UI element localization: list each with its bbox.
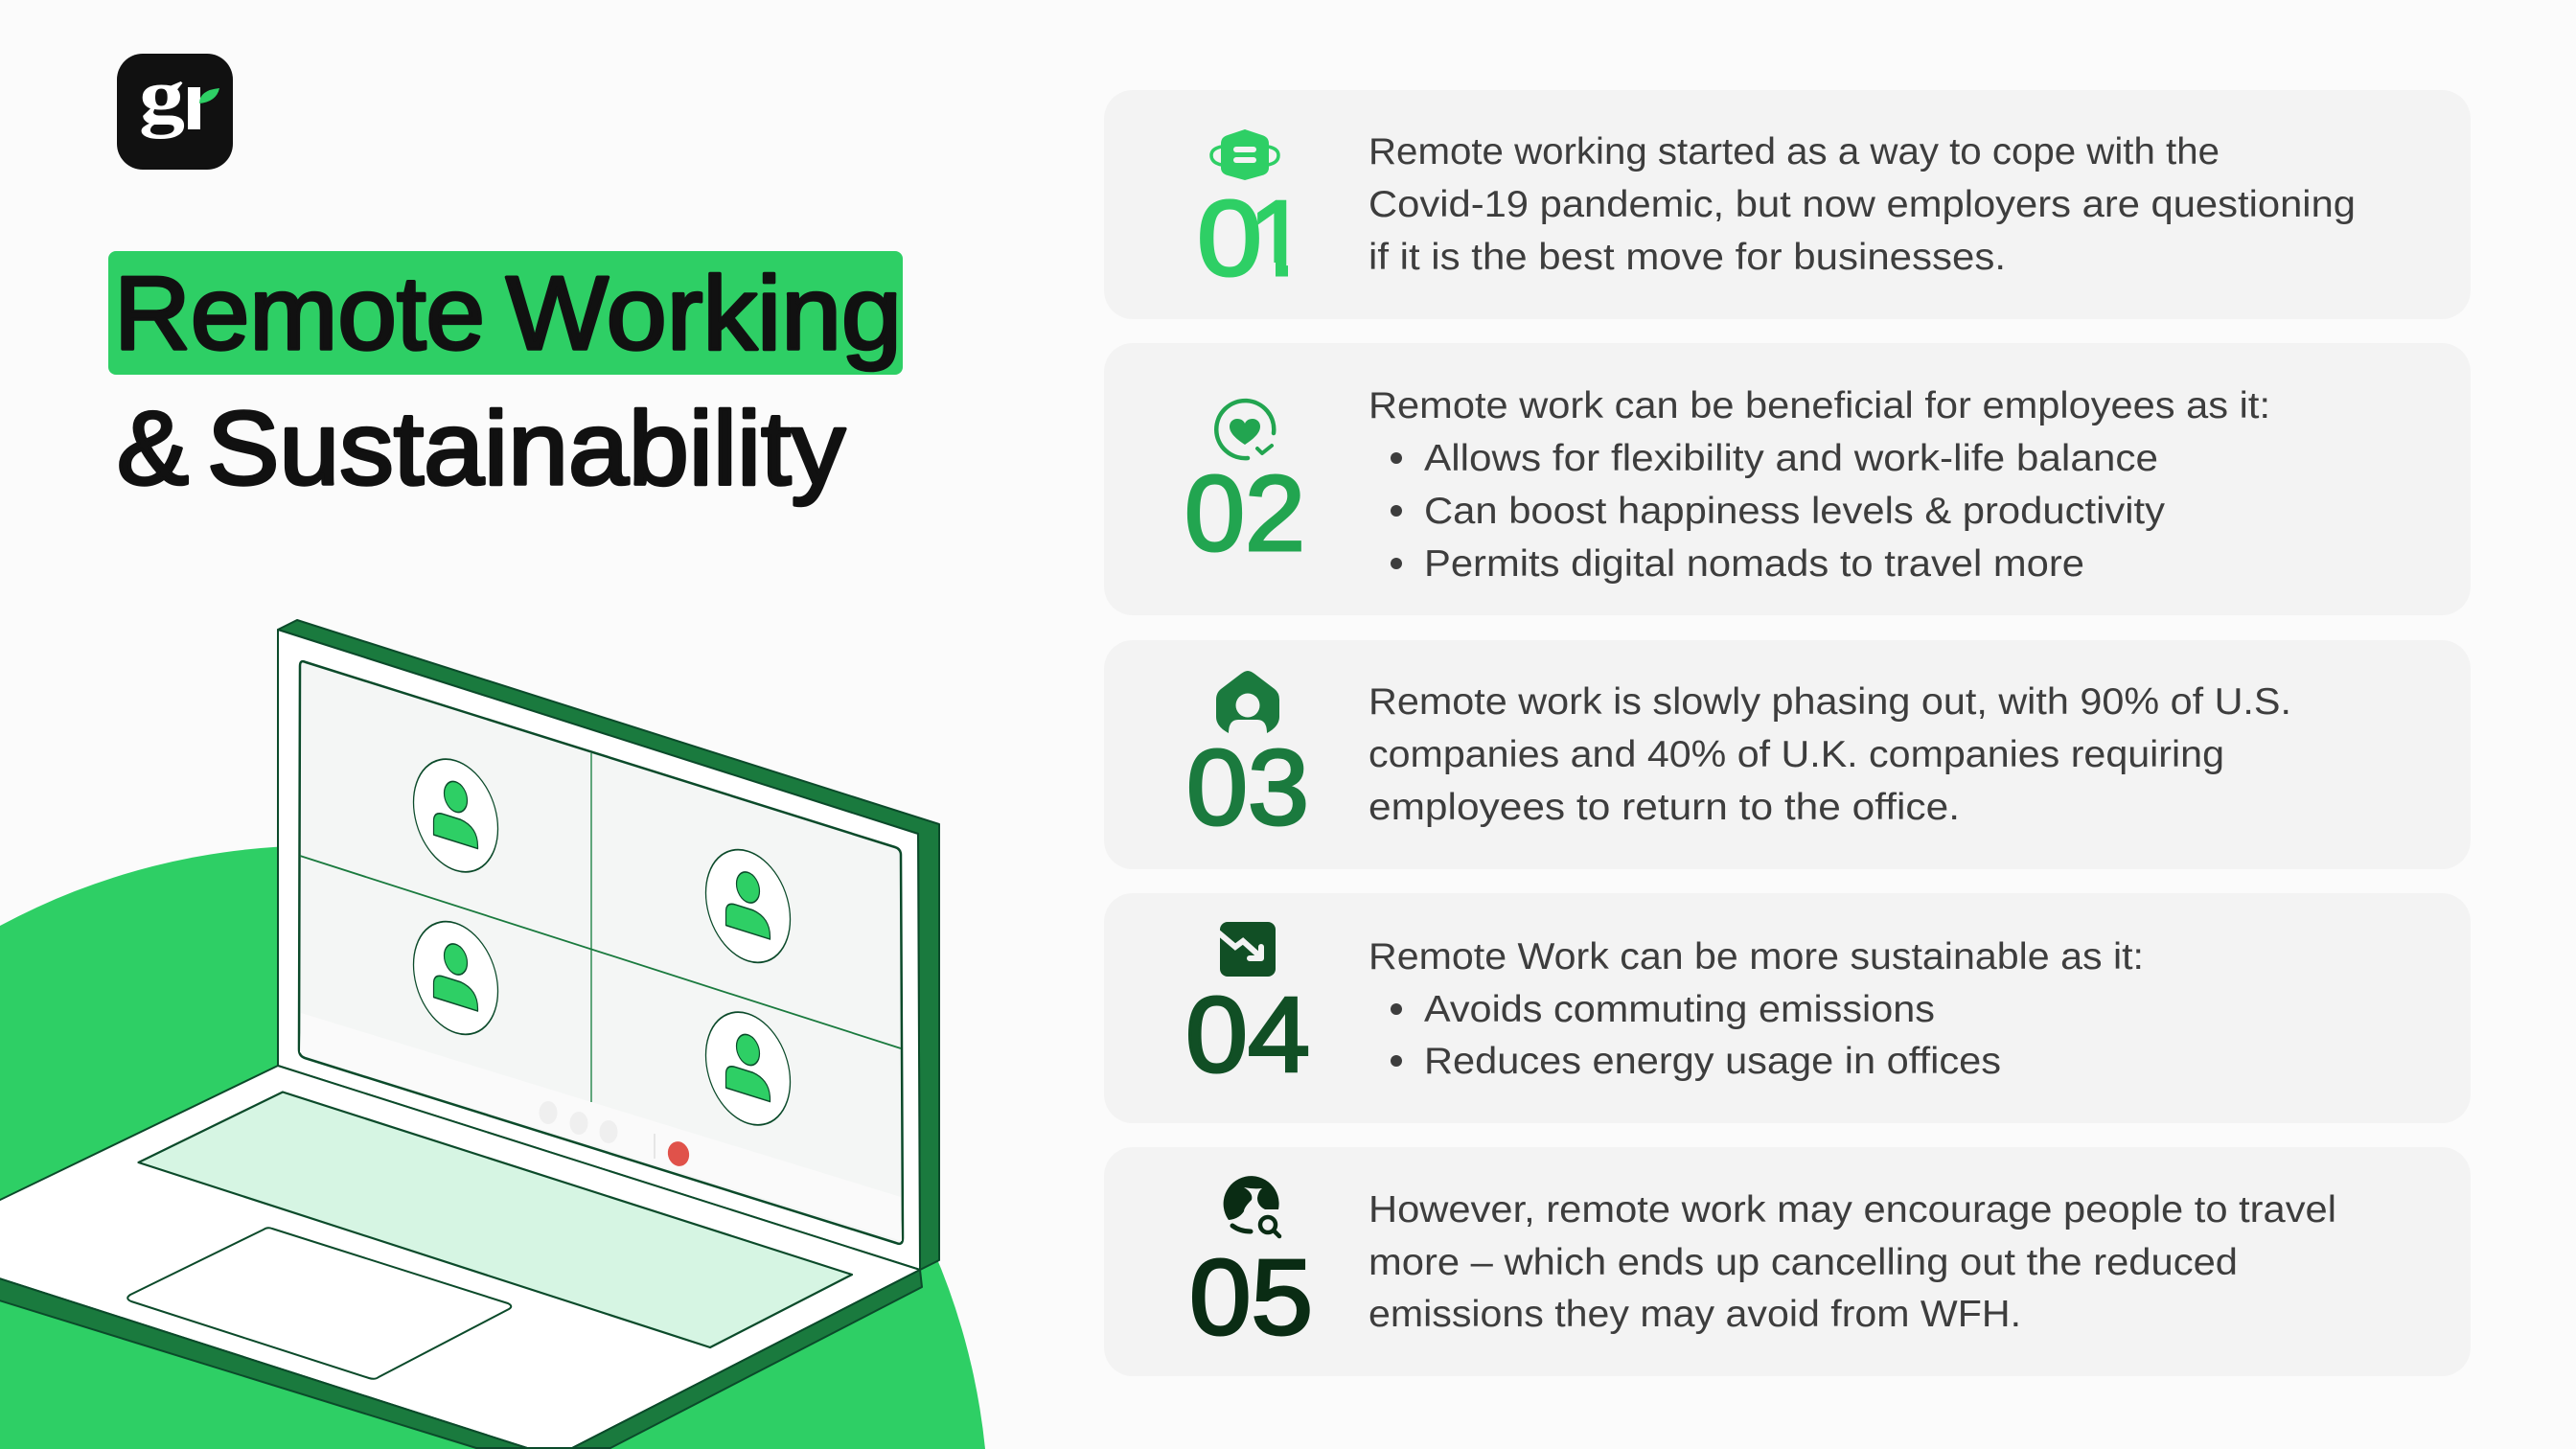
logo: g <box>139 52 185 139</box>
title line 1 <box>114 255 902 372</box>
panel: card 3 <box>1104 640 2471 869</box>
video call grid <box>300 753 901 1102</box>
title <box>108 251 903 507</box>
title line 1: Working <box>506 255 902 372</box>
avatar 4 <box>705 1000 790 1137</box>
card 2 text: Can boost happiness levels & productivity <box>1424 491 2166 532</box>
card 2 text: Allows for flexibility and work-life balance <box>1424 438 2158 479</box>
keyboard <box>138 1092 852 1347</box>
panel: card 1 <box>1104 90 2471 319</box>
screen toolbar <box>300 1013 902 1241</box>
card 2 text <box>1368 385 2270 585</box>
number 02: 02 <box>1184 454 1305 573</box>
card 1 text: Remote working started as a way to cope with the <box>1368 131 2220 172</box>
card 3 text: employees to return to the office. <box>1368 787 1960 828</box>
card 5 text <box>1368 1189 2336 1335</box>
icon: heart in circle <box>1216 401 1274 458</box>
card 1 text: Covid-19 pandemic, but now employers are questioning <box>1368 184 2356 225</box>
screen <box>299 661 903 1244</box>
number 04: 04 <box>1185 976 1310 1094</box>
icon: globe with magnifier <box>1224 1176 1279 1236</box>
card 4 text: Reduces energy usage in offices <box>1424 1041 2001 1082</box>
number 01: 0 <box>1197 179 1262 298</box>
icon: face mask <box>1211 129 1278 180</box>
card 5 text: more – which ends up cancelling out the reduced <box>1368 1242 2238 1283</box>
lid front <box>278 630 920 1270</box>
card 3 text <box>1368 681 2291 828</box>
avatar 1 <box>414 748 498 884</box>
number 05: 05 <box>1189 1238 1313 1357</box>
avatar 2 <box>705 838 790 975</box>
title line 2: Sustainability <box>207 390 846 507</box>
laptop base <box>0 1066 920 1448</box>
card 2 text: Permits digital nomads to travel more <box>1424 543 2084 585</box>
call controls <box>539 1101 692 1168</box>
card 3 text: Remote work is slowly phasing out, with 90% of U.S. <box>1368 681 2291 723</box>
card 1 text: if it is the best move for businesses. <box>1368 237 2006 278</box>
card 4 text <box>1368 936 2144 1082</box>
logo <box>117 52 233 170</box>
card 4 text: Avoids commuting emissions <box>1424 989 1935 1030</box>
card 5 text: emissions they may avoid from WFH. <box>1368 1294 2021 1335</box>
title highlight <box>108 251 903 375</box>
icon: downward trend <box>1217 922 1276 977</box>
card 4 text: Remote Work can be more sustainable as it: <box>1368 936 2144 978</box>
trackpad <box>127 1228 511 1379</box>
panel: card 2 <box>1104 343 2471 615</box>
base left edge <box>0 1277 527 1448</box>
number 03: 03 <box>1186 728 1309 847</box>
panel: card 5 <box>1104 1147 2471 1376</box>
card 5 text: However, remote work may encourage people to travel <box>1368 1189 2336 1230</box>
lid back edge <box>278 620 939 1270</box>
avatar 3 <box>414 909 498 1046</box>
card 1 text <box>1368 131 2356 278</box>
number 01 <box>1197 179 1317 298</box>
icon: person in house <box>1216 671 1279 733</box>
card 3 text: companies and 40% of U.K. companies requiring <box>1368 734 2224 775</box>
panel: card 4 <box>1104 893 2471 1123</box>
number 01: 1 <box>1249 179 1308 298</box>
title line 1: Remote <box>114 255 485 372</box>
base right edge <box>572 1270 922 1448</box>
laptop illustration <box>0 620 939 1448</box>
card 2 text: Remote work can be beneficial for employees as it: <box>1368 385 2270 426</box>
title line 2: & <box>117 390 189 507</box>
green background circle <box>0 845 985 1449</box>
